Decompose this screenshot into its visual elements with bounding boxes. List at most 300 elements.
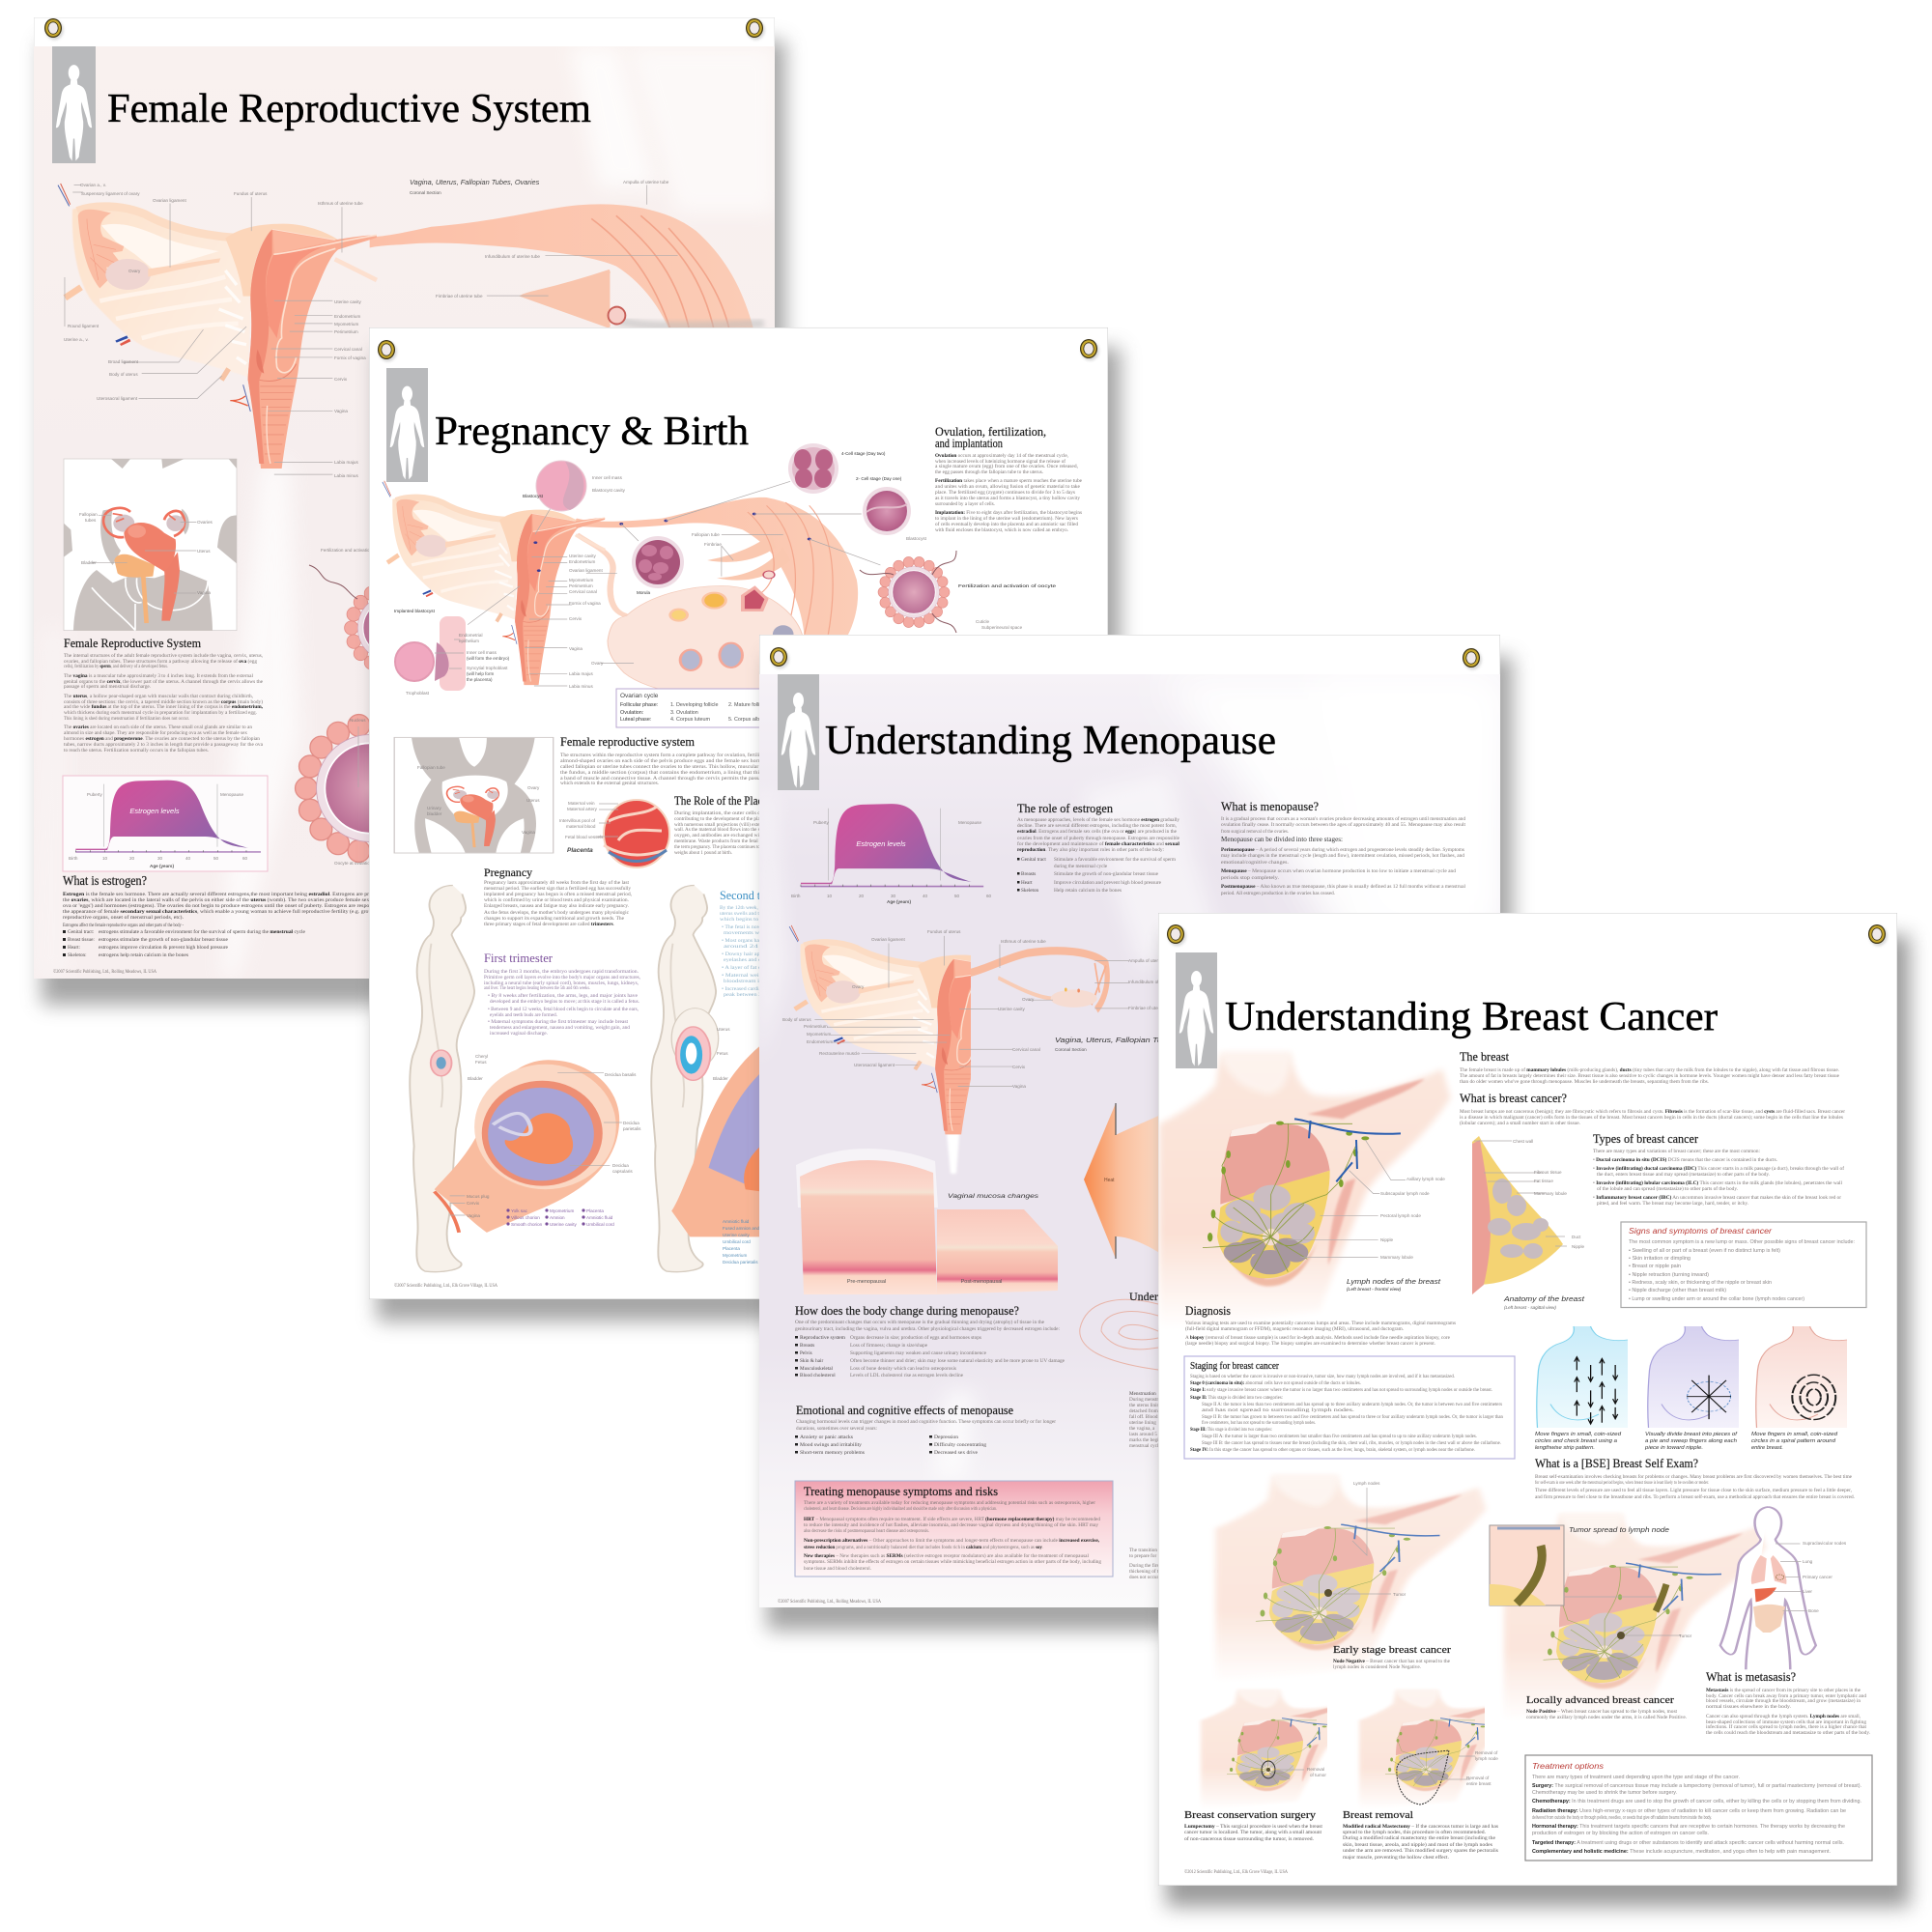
illustration: oocytes: Oocyte at ovulation (334, 861, 373, 866)
chart: estrogen levels: 30 (891, 894, 896, 898)
chart: estrogen levels: Age (years) (887, 899, 911, 904)
illustration: breast conservation surgery: of tumor (1310, 1773, 1326, 1777)
text block: how does the body change: Musculoskeletal (800, 1366, 834, 1372)
callout: treating menopause symptoms and risks: stress reduction programs, and a nutritionally balanced diet that includes foods rich in calcium and phytoestrogens, such as soy. (804, 1544, 1043, 1550)
text block: what is estrogen: the ovaries , which are located in the lateral walls of the pelvis on either side of the uterus (womb). The two ovaries produce female sex cells (the (63, 896, 392, 903)
text block: first trimester: During the first 3 months, the embryo undergoes rapid transformation. (484, 968, 639, 975)
illustration: locally advanced breast cancer: Tumor (1679, 1634, 1692, 1638)
illustration: implanted blastocyst: Trophoblast (406, 691, 430, 696)
legend: ovarian cycle: 5. Corpus albicans (728, 717, 772, 723)
illustration: breast conservation surgery: Removal (1307, 1767, 1324, 1772)
text block: ovulation, fertilization and implantation: the egg passes through the fallopian tube to the uterus. (935, 469, 1043, 475)
text block: what is metastasis: bean-shaped collections of immune system cells that are important in fighting (1706, 1719, 1866, 1725)
illustration: first trimester uterus and embryo: parietalis (623, 1126, 641, 1131)
illustration: uterus, fallopian tubes and ovaries: Isthmus of uterine tube (318, 201, 363, 206)
text block: breast self exam: for self-exam is one week after the menstrual period begins, when breast tissue is least likely to be swollen or tender. (1535, 1479, 1709, 1486)
text block: ovulation, fertilization and implantation (935, 424, 1083, 533)
illustration: breast self exam, spiral pattern: Move fingers in small, coin-sized (1751, 1432, 1838, 1437)
text block: first trimester: increased vaginal discharge. (490, 1031, 548, 1037)
illustration: fallopian tube, uterus and ovary (383, 481, 880, 697)
illustration: pelvis inset: Fallopian tube (417, 765, 445, 770)
text block: understanding menstruation: Menstruation (1129, 1391, 1156, 1397)
illustration: blastocyst and cell stages: Subperineural space (981, 625, 1023, 630)
text block: second trimester: Placenta (723, 1246, 740, 1251)
title: Female Reproductive System (107, 87, 591, 131)
illustration: placenta: Fetal blood vessels (565, 835, 604, 839)
illustration: fallopian tube, uterus and ovary: Cervix (569, 616, 582, 621)
illustration: pelvis inset: Bladder (81, 560, 97, 565)
illustration: uterus, fallopian tubes and ovaries: Ovarian ligament (153, 198, 186, 203)
illustration: breast removal: lymph node (1475, 1756, 1498, 1761)
text block: female reproductive system: almond in size and shape. They are responsible for producing ova as well as the female sex (64, 729, 247, 736)
text block: the role of estrogen: Heart (1021, 880, 1033, 886)
illustration: fallopian tube, uterus and ovary: Endometrium (569, 559, 595, 564)
text block: breast self exam: What is a [BSE] Breast Self Exam? (1535, 1456, 1698, 1470)
text block: second trimester: bloodstream increases (724, 979, 781, 984)
illustration: blastocyst and cell stages: Blastocyst cavity (592, 488, 626, 493)
callout: staging for breast cancer: Staging for breast cancer (1190, 1361, 1280, 1372)
text block: the role of estrogen: reproduction. They also play important roles in other parts of the body: (1017, 846, 1165, 853)
text block: types of breast cancer: of the lobule and can spread (metastasize) to other parts of the body. (1597, 1185, 1738, 1192)
illustration: second trimester uterus (671, 1035, 777, 1236)
callout: staging for breast cancer: and has not spread to surrounding lymph nodes. (1202, 1407, 1354, 1413)
illustration: uterus and fallopian tubes: Ovary (852, 984, 865, 989)
illustration: uterus, fallopian tubes and ovaries: Cervix (334, 377, 348, 382)
text block: types of breast cancer: There are many types and variations of breast cancer; these are the most common: (1593, 1148, 1761, 1154)
text block: what is estrogen: Heart: (68, 945, 81, 951)
illustration: lymph nodes of the breast: Nipple (1380, 1237, 1393, 1242)
illustration: lymph nodes of the breast: Mammary lobule (1380, 1255, 1413, 1260)
illustration: blastocyst and cell stages: Morula (637, 590, 650, 595)
text block: pregnancy: which is confirmed by urine or blood tests and physical examination. (484, 896, 629, 903)
illustration: uterus, fallopian tubes and ovaries: Round ligament (68, 324, 99, 328)
text block: pregnancy: changes to support its expanding nutritional and growth needs. The (484, 916, 625, 922)
chart: estrogen levels: 50 (954, 894, 960, 898)
text block: the role of estrogen: Help retain calcium in the bones (1054, 888, 1122, 894)
text block: second trimester: By the 12th week, the fetus (720, 904, 778, 911)
chart: estrogen levels: 20 (859, 894, 865, 898)
text block: pregnancy (484, 866, 632, 927)
text block: emotional and cognitive effects (795, 1403, 1056, 1456)
text block: female reproductive system: passage of sperm and menstrual discharge. (64, 683, 151, 690)
text block: what is menopause: What is menopause? (1221, 799, 1319, 813)
illustration: placenta (559, 800, 669, 867)
text block: role of the placenta: oxygen, and antibodies are exchanged with the (674, 833, 772, 838)
text block: understanding menstruation: to prepare for (1129, 1552, 1156, 1559)
illustration: uterus and fallopian tubes: Perimetrium (804, 1024, 828, 1029)
text block: pregnancy: As the fetus develops, the mother's body undergoes many physiologic (484, 909, 630, 916)
callout: signs and symptoms: Signs and symptoms of breast cancer (1629, 1227, 1772, 1236)
legend: ovarian cycle: Luteal phase: (620, 717, 651, 723)
illustration: pelvis inset: Uterus (197, 549, 211, 554)
callout: staging for breast cancer: Stage III: This stage is divided into two categories: (1190, 1427, 1272, 1433)
callout: treating menopause symptoms and risks: bone tissue and blood cholesterol. (804, 1566, 871, 1572)
illustration: pregnant body profiles (410, 886, 730, 1272)
text block: understanding menstruation: uterine lining (1129, 1420, 1156, 1426)
text block: first trimester (484, 951, 640, 1037)
illustration: breast conservation surgery: of non-cancerous tissue surrounding the tumor, is removed. (1184, 1835, 1314, 1842)
text block: what is estrogen: estrogens improve circulation & prevent high blood pressure (99, 945, 229, 951)
text block: emotional and cognitive effects: Short-term memory problems (800, 1450, 865, 1456)
illustration: implanted blastocyst: (will form the embryo) (467, 656, 510, 661)
illustration: vaginal mucosa changes: Post-menopausal (961, 1279, 1002, 1285)
illustration: uterus, fallopian tubes and ovaries: Fornix of vagina (334, 355, 366, 360)
illustration: anatomy of the breast, sagittal view (1472, 1136, 1585, 1310)
illustration: uterus, fallopian tubes and ovaries: Labia majus (334, 460, 358, 465)
text block: ovulation, fertilization and implantation: Ovulation, fertilization, (935, 424, 1046, 439)
text block: ovulation, fertilization and implantation: Implantation: Five to eight days after fertilization, the blastocyst begins (935, 509, 1082, 516)
text block: emotional and cognitive effects: Changing hormonal levels can trigger changes in mood and cognitive function. These symptoms can occur briefly or for longer (796, 1418, 1056, 1425)
illustration: uterus and fallopian tubes: Fundus of uterus (927, 929, 961, 934)
text block: female reproductive system (64, 636, 264, 753)
illustration: pelvis inset (64, 459, 237, 631)
text block: second trimester: uterus swells and the lower (720, 911, 778, 917)
text block: female reproductive system: The structures within the reproductive system form a complete pathway for ovulation, fertilization (560, 752, 773, 758)
text block: how does the body change: Pelvis (800, 1350, 812, 1356)
callout: treatment options: Treatment options (1532, 1762, 1604, 1771)
illustration: blastocyst and cell stages: Blastocyst (523, 494, 544, 498)
text block: first trimester: including a neural tube (early spinal cord), bones, muscles, lungs, kidneys, (484, 980, 639, 986)
text block: types of breast cancer: • Invasive (infiltrating) ductal carcinoma (IDC) This cancer starts in a milk passage (a duct), breaks through the wall of (1593, 1165, 1844, 1172)
illustration: locally advanced breast cancer: Node Positive – When breast cancer has spread to the lymph nodes, most (1526, 1709, 1678, 1715)
text block: emotional and cognitive effects: Difficulty concentrating (934, 1441, 986, 1448)
chart: estrogen levels: 50 (213, 856, 219, 861)
callout: signs and symptoms: • Nipple discharge (other than breast milk) (1629, 1288, 1726, 1293)
text block: ovulation, fertilization and implantation: as it travels into the uterus and forms a blastocyst, a tiny hollow cavity (935, 495, 1080, 501)
callout: signs and symptoms: • Redness, scaly skin, or thickening of the nipple or breast skin (1629, 1280, 1772, 1286)
illustration: metastasis body: Primary cancer (1803, 1575, 1833, 1579)
illustration: anatomy of the breast, sagittal view: Anatomy of the breast (1503, 1296, 1585, 1303)
text block: understanding menstruation: fall off. Blood (1129, 1413, 1158, 1420)
text block: breast self exam: Three different levels of pressure are used to feel all tissue layers. Light pressure for tissue close to the skin surface, medium pressure to feel a little deeper, (1535, 1487, 1852, 1493)
text block: first trimester: • Maternal symptoms during the first trimester may include breast (488, 1018, 629, 1025)
illustration: lymph nodes of the breast: Pectoral lymph node (1380, 1213, 1421, 1218)
illustration: breast self exam, pie pattern: Visually divide breast into pieces of (1645, 1432, 1739, 1437)
text block: ovulation, fertilization and implantation: Ovulation occurs at approximately day 14 of the menstrual cycle, (935, 452, 1068, 459)
text block: what is menopause: from surgical removal of the ovaries. (1221, 828, 1289, 835)
text block: the role of estrogen: Breasts (1021, 871, 1036, 877)
callout: signs and symptoms: • Breast or nipple pain (1629, 1264, 1681, 1269)
text block: what is estrogen: estrogens stimulate a favorable environment for the survival of sperm during the menstrual cycle (99, 928, 306, 935)
text block: breast self exam: and firm pressure to feel close to the breastbone and ribs. To perform a breast self-exam, use a methodical approach that ensures the entire breast is covered. (1535, 1493, 1855, 1500)
text block: first trimester: eyelids and teeth buds are formed. (490, 1011, 557, 1018)
illustration: blastocyst and cell stages: Cuticle (976, 619, 989, 624)
illustration: metastasis body (1720, 1507, 1847, 1669)
callout: treating menopause symptoms and risks: New therapies – New therapies such as SERMs (selective estrogen receptor modulators) are also available for the treatment of menopausal (804, 1552, 1090, 1559)
text block: female reproductive system: Female Reproductive System (64, 636, 201, 650)
legend: ovarian cycle: Follicular phase: (620, 702, 658, 708)
illustration: anatomy of the breast, sagittal view: (Left breast - sagittal view) (1504, 1305, 1556, 1310)
illustration: uterus and fallopian tubes: Ovarian ligament (871, 937, 905, 942)
text block: second trimester: • Maternal weight gain (722, 973, 781, 979)
text block: ovulation, fertilization and implantation: and unites with an ovum, allowing fusion of genetic material to take (935, 483, 1081, 490)
text block: what is metastasis: Metastasis is the spread of cancer from its primary site to other places in the (1706, 1687, 1861, 1693)
title: Understanding Menopause (825, 719, 1276, 763)
illustration: fallopian tube, uterus and ovary: Fallopian tube (692, 532, 720, 537)
illustration: uterus and fallopian tubes: Coronal Section (1055, 1047, 1087, 1052)
text block: what is menopause: Perimenopause – A period of several years during which estrogen and progesterone levels steadily decline. Symptoms (1221, 846, 1464, 853)
illustration: breast self exam, pie pattern: a pie and sweep fingers along each (1645, 1438, 1737, 1444)
text block: understanding menstruation: During menstruation (1129, 1397, 1171, 1403)
text block: ovulation, fertilization and implantation: surrounded by a layer of cells. (935, 500, 995, 507)
illustration: pregnant body profiles: Cheryl (475, 1054, 488, 1059)
text block: how does the body change: Loss of firmness; change in size/shape (850, 1342, 928, 1349)
text block: female reproductive system (560, 737, 759, 785)
text block: emotional and cognitive effects: Depression (934, 1435, 958, 1440)
illustration: first trimester uterus and embryo: Decidua (623, 1121, 639, 1125)
text block: first trimester: and liver. The heart begins beating between the 5th and 6th weeks. (484, 985, 590, 991)
illustration: anatomy of the breast, sagittal view: Mammary lobule (1534, 1191, 1567, 1196)
chart: estrogen levels: Birth (791, 894, 801, 898)
illustration: fallopian tube, uterus and ovary: Cervical canal (569, 589, 597, 594)
illustration: first trimester uterus and embryo: Mucus plug (467, 1194, 490, 1199)
text block: what is breast cancer: is a disease in which malignant (cancer) cells form in the tissues of the breast. Most breast cancers begin in cells in the ducts (ductal cancers); some begin in the cells that line the lobules (1460, 1114, 1843, 1121)
text block: the role of estrogen: As menopause approaches, levels of the female sex hormone estrogen gradually (1017, 816, 1179, 823)
illustration: early stage breast cancer: Node Negative – Breast cancer that has not spread to the (1333, 1659, 1451, 1664)
illustration: pelvis inset: Ovaries (197, 520, 213, 525)
text block: how does the body change: Organs decrease in size; production of eggs and hormones stops (850, 1334, 981, 1341)
text block: second trimester: • Increased cardiac output (722, 986, 781, 992)
text block: what is metastasis: blood vessels, circulate through the bloodstream, and grow (metastasize) in (1706, 1697, 1861, 1704)
illustration: pregnant body profiles: Bladder (468, 1076, 483, 1081)
chart: estrogen levels: 10 (827, 894, 833, 898)
callout: signs and symptoms (1621, 1222, 1866, 1308)
callout: staging for breast cancer: Stage II A: the tumor is less than two centimeters and has spread up to three axillary underarm lymph nodes. Or, the tumor is between two and five centimeters (1202, 1401, 1502, 1407)
text block: what is estrogen: Estrogen is the female sex hormone. There are actually several different estrogens,the most important being estradiol . Estrogens are produced in (63, 891, 391, 897)
callout: treatment options: Radiation therapy: Uses high-energy x-rays or other types of radiation to kill cancer cells or keep them from growing. Radiation can be (1532, 1808, 1846, 1814)
text block: ovulation, fertilization and implantation: a single mature ovum (egg) from one of the ovaries. Once released, (935, 463, 1078, 469)
title: Understanding Breast Cancer (1225, 995, 1718, 1039)
illustration: pregnant body profiles: Fetus (717, 1051, 728, 1056)
text block: emotional and cognitive effects: Mood swings and irritability (800, 1442, 862, 1448)
illustration: breast removal: Breast removal (1343, 1809, 1413, 1821)
illustration: uterus, fallopian tubes and ovaries: Myometrium (334, 322, 358, 327)
text block: how does the body change: Loss of bone density which can lead to osteoporosis (850, 1365, 956, 1372)
illustration: early stage breast cancer: lymph nodes is considered Node Negative. (1333, 1664, 1421, 1670)
text block: female reproductive system: This lining is shed during menstruation if fertilization does not occur. (64, 715, 189, 722)
text block: the role of estrogen: during the menstrual cycle (1054, 864, 1108, 869)
legend: first trimester: Smooth chorion (511, 1222, 543, 1227)
illustration: implanted blastocyst: the placenta) (467, 677, 493, 682)
text block: what is breast cancer: What is breast cancer? (1460, 1091, 1567, 1105)
text block: types of breast cancer: • Ductal carcinoma in situ (DCIS) DCIS means that the cancer is contained in the ducts. (1593, 1156, 1777, 1163)
callout: treatment options: production of estrogen or by blocking the action of estrogen on cancer cells. (1532, 1831, 1709, 1836)
legend: first trimester: Uterine cavity (550, 1222, 578, 1227)
text block: ovulation, fertilization and implantation: with fluid encloses the blastocyst, which is now called an embryo. (935, 526, 1068, 533)
chart: estrogen levels: 40 (185, 856, 191, 861)
text block: female reproductive system: The internal structures of the adult female reproductive system include the vagina, cervix, uterus, (64, 652, 263, 659)
text block: understanding menstruation: detached from (1129, 1407, 1158, 1414)
text block: role of the placenta: wall. As the maternal blood flows into the spaces (674, 826, 771, 833)
callout: treatment options: Chemotherapy may be used to shrink the tumor before surgery. (1532, 1790, 1677, 1796)
chart: estrogen levels: Puberty (87, 792, 103, 797)
illustration: uterus, fallopian tubes and ovaries: Cervical canal (334, 347, 362, 352)
text block: diagnosis (1185, 1303, 1456, 1347)
callout: treating menopause symptoms and risks: to reduce the intensity and incidence of hot flashes, alleviate insomnia, and decrease vaginal dryness and drying/thinning of the skin. HRT may (804, 1521, 1098, 1528)
illustration: uterus, fallopian tubes and ovaries: Vagina (334, 409, 348, 413)
illustration: placenta: Maternal vein (568, 801, 595, 806)
text block: pregnancy: menstrual period. The earliest sign that a fertilized egg has successfully (484, 885, 631, 892)
legend: first trimester: Myometrium (550, 1208, 574, 1213)
text block: understanding menstruation: does not occur (1129, 1575, 1159, 1580)
text block: second trimester: • The fetal is now moving (722, 923, 780, 930)
illustration: uterus, fallopian tubes and ovaries: Body of uterus (109, 372, 138, 377)
text block: second trimester: peak between 28 weeks (724, 992, 781, 998)
illustration: pelvis inset: Vagina (197, 590, 211, 595)
illustration: blastocyst and cell stages: Blastocyst (906, 536, 927, 541)
illustration: pelvis inset: bladder (427, 811, 442, 816)
illustration: fallopian tube, uterus and ovary: Ovary (591, 661, 604, 666)
callout: treatment options (1525, 1755, 1872, 1861)
text block: ovulation, fertilization and implantation: and implantation (935, 436, 1003, 450)
illustration: implanted blastocyst: Inner cell mass (467, 650, 497, 655)
text block: second trimester: Decidua parietalis (723, 1260, 758, 1264)
illustration: uterus, fallopian tubes and ovaries: Uterine a., v. (64, 337, 89, 342)
text block: breast self exam (1535, 1456, 1855, 1500)
text block: what is estrogen: reproductive organs, onset of menstrual periods, etc). (63, 914, 184, 921)
illustration: uterus and fallopian tubes: Endometrium (807, 1039, 833, 1044)
illustration: uterus, fallopian tubes and ovaries: Infundibulum of uterine tube (485, 254, 540, 259)
text block: what is breast cancer: (lobular cancers); and a small number start in other tissue. (1460, 1120, 1580, 1126)
text block: what is estrogen: estrogens help retain calcium in the bones (99, 952, 188, 958)
illustration: fallopian tube, uterus and ovary: Vagina (569, 646, 582, 651)
callout: signs and symptoms: The most common symptom is a new lump or mass. Other possible signs of breast cancer include: (1629, 1239, 1855, 1245)
illustration: blastocyst and cell stages (523, 443, 1057, 633)
text block: what is estrogen: Skeleton: (68, 952, 87, 958)
illustration: fallopian tube, uterus and ovary: Myometrium (569, 578, 593, 582)
text block: female reproductive system: genital organs to the cervix, the lower part of the uterus. A channel through the cervix allows the (64, 678, 264, 685)
callout: treating menopause symptoms and risks: Non-prescription alternatives – Other approaches to limit the symptoms and longer-term effects of menopause can include increased exercise, (804, 1537, 1100, 1544)
illustration: vaginal mucosa changes: Vaginal mucosa changes (948, 1193, 1039, 1200)
illustration: pelvis inset: Vagina (522, 830, 535, 835)
illustration: metastasis body: Liver (1803, 1589, 1812, 1594)
text block: how does the body change: Often become thinner and drier; skin may lose some natural elasticity and be more prone to UV damage (850, 1357, 1065, 1364)
illustration: vaginal mucosa changes (796, 1149, 1058, 1294)
text block: how does the body change: How does the body change during menopause? (795, 1303, 1019, 1318)
callout: treating menopause symptoms and risks (795, 1481, 1113, 1577)
illustration: locally advanced breast cancer: Tumor spread to lymph node (1569, 1527, 1669, 1534)
illustration: uterus and fallopian tubes: Cervical canal (1012, 1047, 1040, 1052)
text block: second trimester: • A layer of fat develops (722, 964, 780, 971)
text block: the role of estrogen: Skeleton (1021, 888, 1039, 894)
chart: estrogen levels: 40 (923, 894, 928, 898)
illustration: pelvis inset (394, 737, 554, 853)
callout: treating menopause symptoms and risks: cholesterol, and heart disease. Decisions are highly individualized and should be made only after discussion with a physician. (804, 1505, 997, 1512)
illustration: breast removal: Removal of (1475, 1750, 1498, 1755)
chart: estrogen levels: Birth (69, 856, 78, 861)
illustration: implanted blastocyst: epithelium (459, 639, 479, 643)
callout: staging for breast cancer: Stage III A: the tumor is larger than two centimeters but smaller than five centimeters and has spread to up to nine axillary underarm lymph nodes. (1202, 1433, 1477, 1439)
text block: breast self exam: Breast self-examination involves checking breasts for problems or changes. Many breast problems are first discovered by women themselves. The best time (1535, 1473, 1853, 1480)
text block: female reproductive system: and the wide fundus at the top of the uterus. The inner lining of the corpus is the endometrium, (64, 703, 264, 710)
text block: diagnosis: (large needle) biopsy and surgical biopsy. The biopsy samples are examined to determine whether breast cancer is present. (1185, 1340, 1435, 1347)
text block: second trimester: • Most organs have begun (722, 938, 780, 944)
illustration: metastasis body: Bone (1808, 1608, 1819, 1613)
illustration: breast removal: major muscle, preventing the hollow chest effect. (1343, 1854, 1449, 1861)
arrow: heat: Heat (1104, 1178, 1115, 1183)
illustration: breast conservation surgery: Breast conservation surgery (1184, 1809, 1317, 1821)
illustration: uterus, fallopian tubes and ovaries: Suspensory ligament of ovary (81, 191, 140, 196)
text block: what is menopause (1221, 799, 1466, 896)
illustration: locally advanced breast cancer (1490, 1514, 1766, 1721)
illustration: uterus and fallopian tubes: Infundibulum of uterine tube (1128, 980, 1183, 984)
text block: diagnosis: Various imaging tests are used to examine potentially cancerous lumps and areas. These include mammograms, digital mammograms (1185, 1321, 1456, 1326)
eyelets (770, 647, 1482, 670)
illustration: pelvis inset: Uterus (526, 798, 540, 803)
text block: types of breast cancer: • Inflammatory breast cancer (IBC) An uncommon invasive breast cancer that makes the skin of the breast look red or (1593, 1194, 1841, 1201)
text block: how does the body change (795, 1303, 1065, 1378)
illustration: uterus, fallopian tubes and ovaries: Ampulla of uterine tube (623, 180, 669, 185)
illustration: uterus and fallopian tubes: Vagina (1012, 1084, 1026, 1089)
text block: understanding menstruation: thickening of the (1129, 1568, 1164, 1575)
illustration: blastocyst and cell stages: Fertilization and activation of oocyte (958, 583, 1057, 588)
illustration: breast self exam, spiral pattern: entire breast. (1751, 1445, 1783, 1451)
text block: role of the placenta: contributing to the development of the placenta (674, 815, 772, 822)
text block: the role of estrogen: decline. There are several different estrogens, including the most potent form, (1017, 822, 1177, 829)
illustration: breast self exam, spiral pattern (1751, 1326, 1847, 1451)
callout: treatment options: Complementary and holistic medicine: These include acupuncture, meditation, and yoga often to help with pain management. (1532, 1849, 1831, 1855)
illustration: uterus and fallopian tubes: Isthmus of uterine tube (1001, 939, 1046, 944)
text block: what is metastasis: Cancer can also spread through the lymph system. Lymph nodes are small, (1706, 1714, 1861, 1719)
text block: female reproductive system: The vagina is a muscular tube approximately 3 to 4 inches long. It extends from the external (64, 672, 254, 679)
illustration: fallopian tube, uterus and ovary: Ovarian ligament (569, 568, 603, 573)
illustration: breast self exam, vertical strip (1535, 1326, 1628, 1451)
text block: the breast (1460, 1049, 1840, 1085)
callout: staging for breast cancer: Stage II: This stage is divided into two categories: (1190, 1395, 1283, 1401)
text block: ovulation, fertilization and implantation: of cells eventually develop into the placenta and an amniotic sac filled (935, 521, 1078, 527)
text block: second trimester: eyelashes and eyebrows (724, 957, 781, 963)
illustration: pregnant body profiles: Uterus (717, 1027, 730, 1032)
poster: Female Reproductive System (34, 17, 785, 1005)
text block: role of the placenta: During implantation, the outer cells of the (674, 810, 772, 816)
callout: staging for breast cancer: five centimeters, but has not spread to the surrounding lymph nodes. (1202, 1419, 1316, 1426)
illustration: implanted blastocyst: Endometrial (459, 633, 483, 638)
text block: the role of estrogen: Stimulate a favorable environment for the survival of sperm (1054, 856, 1176, 863)
legend: ovarian cycle: 1. Developing follicle (670, 702, 718, 708)
text block: understanding menstruation: marks the beginning (1129, 1437, 1171, 1443)
illustration: first trimester uterus and embryo: Decidua (612, 1163, 629, 1168)
text block: second trimester: around 24 weeks (724, 944, 781, 950)
illustration: early stage breast cancer: Tumor (1393, 1592, 1406, 1597)
illustration: oocytes: Nucleus (350, 718, 366, 723)
text block: what is menopause: emotional/cognitive changes. (1221, 860, 1289, 866)
text block: first trimester: Primitive germ cell layers evolve into the body's major organs and structures, (484, 975, 640, 980)
text block: what is menopause: Menopause can be divided into three stages: (1221, 835, 1343, 843)
illustration: breast self exam, spiral pattern: circles in a spiral pattern around (1751, 1438, 1836, 1444)
callout: treating menopause symptoms and risks: HRT – Menopausal symptoms often require no treatment. If side effects are severe, HRT (hormone replacement therapy) may be recommended (804, 1516, 1100, 1522)
poster: Pregnancy & Birth (369, 327, 1121, 1321)
text block: types of breast cancer (1593, 1131, 1844, 1207)
illustration: fallopian tube, uterus and ovary: Fornix of vagina (569, 601, 601, 606)
callout: treating menopause symptoms and risks: also decrease the risks of postmenopausal heart disease and osteoporosis. (804, 1527, 929, 1534)
text block: understanding menstruation: the uterus lining (1129, 1403, 1162, 1408)
text block: how does the body change: Breasts (800, 1343, 814, 1349)
text block: role of the placenta: with numerous small projections (villi) extending (674, 821, 771, 828)
illustration: placenta: maternal blood (566, 824, 596, 829)
illustration: breast self exam, pie pattern: piece in toward nipple. (1644, 1445, 1703, 1451)
illustration: anatomy of the breast, sagittal view: Duct (1572, 1235, 1581, 1239)
illustration: breast removal (1343, 1690, 1534, 1861)
chart: estrogen levels: 10 (102, 856, 108, 861)
callout: treatment options: Targeted therapy: A treatment using drugs or other substances to identify and attack specific cancer cells without harming normal cells. (1532, 1840, 1844, 1846)
icon: female silhouette (1176, 952, 1217, 1068)
text block: what is menopause: It is a gradual process that occurs as a woman's ovaries produce decreasing amounts of estrogen until menstruation and (1221, 815, 1465, 822)
illustration: breast self exam, vertical strip: circles and check breast using a (1535, 1438, 1617, 1444)
callout: staging for breast cancer (1184, 1356, 1515, 1459)
text block: what is menopause: Menopause – Menopause occurs when ovarian hormone production is too low to initiate a menstrual cycle and (1221, 868, 1456, 874)
legend: ovarian cycle: 4. Corpus luteum (670, 717, 711, 723)
illustration: implanted blastocyst (394, 609, 510, 696)
